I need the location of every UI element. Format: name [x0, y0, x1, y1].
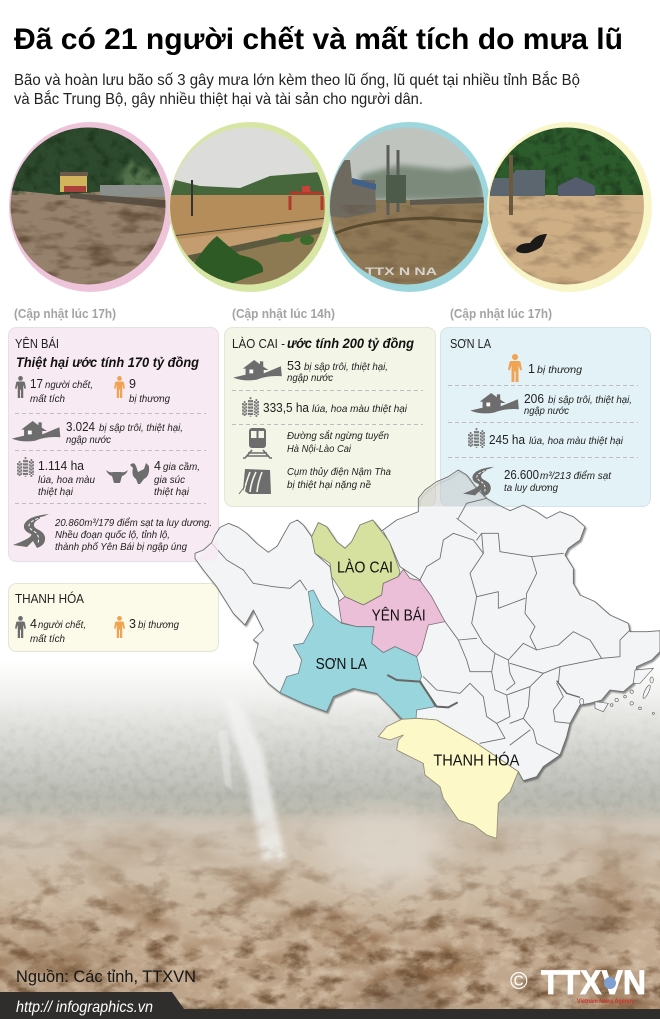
panel: Lào Cai: LÀO CAI -	[232, 336, 285, 351]
icon: rice	[18, 457, 33, 477]
panel: Sơn La: m³/213 điểm sạt	[540, 470, 612, 482]
panel: Yên Bái: 9	[129, 377, 136, 391]
province: Yên Bái	[338, 569, 445, 657]
panel: Yên Bái: 20.860m³/179 điểm sạt ta luy dương.	[54, 517, 212, 529]
panel: Lào Cai: Hà Nội-Lào Cai	[287, 443, 352, 455]
icon: dead or missing person	[15, 376, 26, 398]
panel: Sơn La	[440, 328, 650, 506]
panel: Thanh Hóa: người chết,	[38, 619, 86, 631]
river	[387, 675, 458, 707]
panel: Thanh Hóa: THANH HÓA	[15, 591, 85, 606]
panel: Yên Bái: Nhều đoạn quốc lộ, tỉnh lộ,	[55, 529, 170, 541]
icon: injured person	[114, 376, 125, 398]
panel: Yên Bái: 3.024	[66, 420, 95, 434]
panel: Sơn La: bị sập trôi, thiệt hại,	[548, 394, 632, 406]
province: Sơn La	[280, 590, 435, 720]
panel: Sơn La: 26.600	[504, 468, 539, 482]
land outline	[195, 470, 660, 781]
icon: damaged house	[233, 360, 282, 380]
panel: Yên Bái	[8, 328, 218, 562]
panel: Thanh Hóa: mất tích	[30, 633, 65, 645]
panel: Yên Bái: lúa, hoa màu	[38, 474, 95, 486]
panel: Sơn La: SƠN LA	[450, 337, 492, 351]
photo circle: flooded street with power poles: TTX N NA	[365, 266, 437, 278]
icon: rice	[243, 397, 258, 417]
icon: damaged house	[470, 393, 519, 413]
panel: Lào Cai: 53	[287, 359, 301, 373]
panel: Lào Cai: ngập nước	[287, 372, 334, 384]
panel: Yên Bái: 17	[30, 377, 43, 391]
title: Đã có 21 người chết và mất tích do mưa lũ	[14, 23, 623, 56]
map label: Sơn La: SƠN LA	[316, 656, 368, 673]
map label: Thanh Hóa: THANH HÓA	[433, 753, 520, 770]
update time labels: (Cập nhật lúc 17h)	[450, 306, 552, 321]
panel: Lào Cai: bị sập trôi, thiệt hại,	[304, 361, 388, 373]
logo: TTXVN: TTXVN	[541, 964, 646, 1002]
panel: Yên Bái: ngập nước	[66, 434, 112, 446]
source credit: Nguồn: Các tỉnh, TTXVN	[16, 967, 196, 986]
update time labels: (Cập nhật lúc 17h)	[14, 306, 116, 321]
map label: Yên Bái: YÊN BÁI	[372, 608, 426, 625]
panel: Sơn La: ngập nước	[524, 405, 570, 417]
coast and islands	[557, 668, 654, 714]
panel: Yên Bái: gia súc	[154, 474, 186, 486]
footer bar with website	[0, 992, 660, 1019]
panel: Lào Cai: bị thiệt hại nặng nề	[287, 479, 371, 491]
panel: Thanh Hóa: bị thương	[138, 619, 179, 631]
panel: Yên Bái: bị thương	[129, 393, 170, 405]
icon: landslide road, Sơn La	[463, 467, 494, 496]
intro text: Bão và hoàn lưu bão số 3 gây mưa lớn kèm theo lũ ống, lũ quét tại nhiều tỉnh Bắc Bộ	[14, 70, 580, 89]
photo circle: flooded street with power poles	[329, 122, 490, 292]
panel: Yên Bái: người chết,	[45, 379, 93, 391]
panel: Yên Bái: 1.114 ha	[38, 459, 84, 473]
icon: damaged house	[12, 421, 60, 441]
icon: injured person	[508, 354, 522, 382]
icon: train	[243, 428, 272, 458]
tint where the map overlaps the Yên Bái panel	[196, 540, 218, 561]
icon: cow and rooster	[106, 463, 149, 484]
update time labels	[14, 306, 552, 321]
icon: dead or missing person	[15, 616, 26, 638]
panel: Sơn La: bị thương	[537, 364, 582, 376]
intro text: và Bắc Trung Bộ, gây nhiều thiệt hại và tài sản cho người dân.	[14, 89, 423, 108]
panel: Sơn La: 245 ha	[489, 433, 525, 447]
panel: Lào Cai: Cụm thủy điện Nậm Tha	[287, 466, 391, 478]
panel: Yên Bái: gia cầm,	[163, 461, 200, 473]
icon: hydropower dam	[239, 469, 271, 494]
panel: Yên Bái: mất tích	[30, 393, 65, 405]
intro text	[14, 70, 580, 108]
update time labels: (Cập nhật lúc 14h)	[232, 306, 335, 321]
province borders	[212, 498, 630, 755]
province: Lào Cai	[312, 520, 400, 605]
panel: Thanh Hóa: 3	[129, 617, 136, 631]
panel: Sơn La: 206	[524, 392, 544, 406]
panel: Lào Cai: ước tính 200 tỷ đồng	[287, 335, 414, 351]
logo: TTXVN	[510, 964, 646, 1005]
panel: Lào Cai: 333,5 ha	[263, 401, 309, 415]
logo: TTXVN: ©	[510, 968, 528, 995]
panel: Thanh Hóa: 4	[30, 617, 37, 631]
photo circle: flooded village with gate	[169, 122, 331, 294]
panel: Yên Bái: thiệt hại	[38, 486, 74, 498]
logo: TTXVN: Vietnam News Agency	[577, 999, 635, 1005]
background photo: flood and mist	[0, 678, 660, 1009]
photo circle: torrent with buffalo	[487, 122, 652, 292]
panel: Yên Bái: bị sập trôi, thiệt hại,	[99, 422, 183, 434]
icon: landslide road	[13, 514, 49, 548]
panel: Yên Bái: YÊN BÁI	[15, 336, 59, 351]
panel: Lào Cai	[224, 328, 436, 506]
panel: Yên Bái: thành phố Yên Bái bị ngập úng	[55, 541, 187, 553]
panel: Sơn La: lúa, hoa màu thiệt hại	[529, 435, 624, 447]
icon: injured person	[114, 616, 125, 638]
panel: Lào Cai: Đường sắt ngừng tuyến	[287, 429, 389, 442]
icon: rice	[469, 428, 484, 448]
panel: Yên Bái: thiệt hại	[154, 486, 190, 498]
panel: Sơn La: ta luy dương	[504, 482, 558, 494]
photo circle: Yên Bái flood	[9, 122, 172, 292]
panel: Yên Bái: 4	[154, 459, 161, 473]
footer bar with website: http:// infographics.vn	[16, 999, 153, 1016]
panel: Yên Bái: Thiệt hại ước tính 170 tỷ đồng	[16, 354, 199, 370]
panel: Sơn La: 1	[528, 362, 535, 376]
panel: Thanh Hóa	[8, 584, 218, 652]
map label: Lào Cai: LÀO CAI	[337, 559, 393, 576]
panel: Lào Cai: lúa, hoa màu thiệt hại	[312, 403, 408, 415]
province: Thanh Hóa	[378, 718, 518, 838]
map: northern Vietnam provinces	[195, 470, 660, 838]
